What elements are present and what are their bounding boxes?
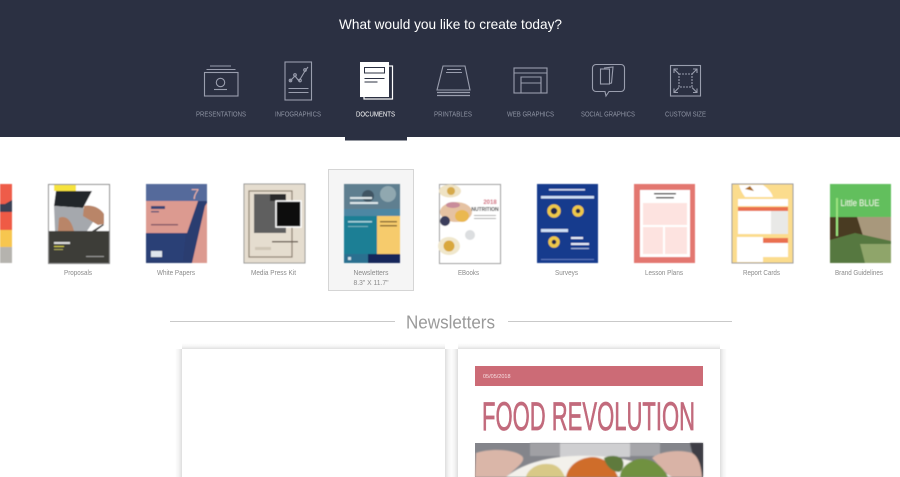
thumbnail: brand guidelines: Little BLUE [840,198,880,208]
thumbnail: ebooks [438,184,500,277]
thumbnail: lesson plans: Lesson Plans [645,268,683,277]
thumbnail: surveys [537,184,598,277]
thumbnail: lesson plans [634,184,695,277]
category: custom size [665,66,706,118]
thumbnail: brand guidelines: Brand Guidelines [835,268,883,277]
category: social graphics [581,64,635,118]
thumbnail: cropped template [0,184,12,263]
category: custom size: CUSTOM SIZE [665,112,706,118]
newsletter title: FOOD REVOLUTION [482,395,695,439]
category: presentations: PRESENTATIONS [196,112,246,118]
category: documents (selected): DOCUMENTS [356,112,395,118]
thumbnail: brand guidelines [830,184,891,277]
thumbnail: report cards [732,184,793,277]
thumbnail: proposals [48,184,110,277]
category: infographics: INFOGRAPHICS [275,112,321,118]
category: social graphics: SOCIAL GRAPHICS [581,112,635,118]
category: printables [434,66,472,118]
thumbnail: report cards: Report Cards [743,268,780,277]
blank template card [175,343,452,477]
thumbnail: newsletters (selected) [328,170,414,290]
category: infographics [275,62,321,118]
thumbnail: white papers: White Papers [157,268,195,277]
thumbnail: white papers: 7 [191,186,199,203]
template card: food revolution [451,343,727,477]
category: web graphics: WEB GRAPHICS [507,112,554,118]
thumbnail: ebooks: 2018 [483,200,497,206]
thumbnail: media press kit [244,184,305,277]
date banner [475,366,703,386]
category: web graphics [507,68,554,118]
template carousel [0,170,891,290]
category: printables: PRINTABLES [434,112,472,118]
thumbnail: ebooks: NUTRITION [471,207,499,213]
thumbnail: media press kit: Media Press Kit [251,268,297,277]
thumbnail: surveys: Surveys [555,268,578,277]
category: presentations [196,66,246,118]
date banner: 05/05/2018 [483,374,511,380]
header band [0,0,900,140]
section heading: newsletters: Newsletters [406,312,495,332]
title: What would you like to create today? [339,16,562,32]
thumbnail: proposals: Proposals [64,268,92,277]
thumbnail: white papers [146,184,207,277]
thumbnail: ebooks: EBooks [458,268,479,277]
category: documents (selected) [356,62,395,118]
food photo [475,443,703,477]
thumbnail: newsletters (selected): Newsletters [354,268,389,277]
thumbnail: newsletters (selected): 8.3" X 11.7" [354,278,389,287]
